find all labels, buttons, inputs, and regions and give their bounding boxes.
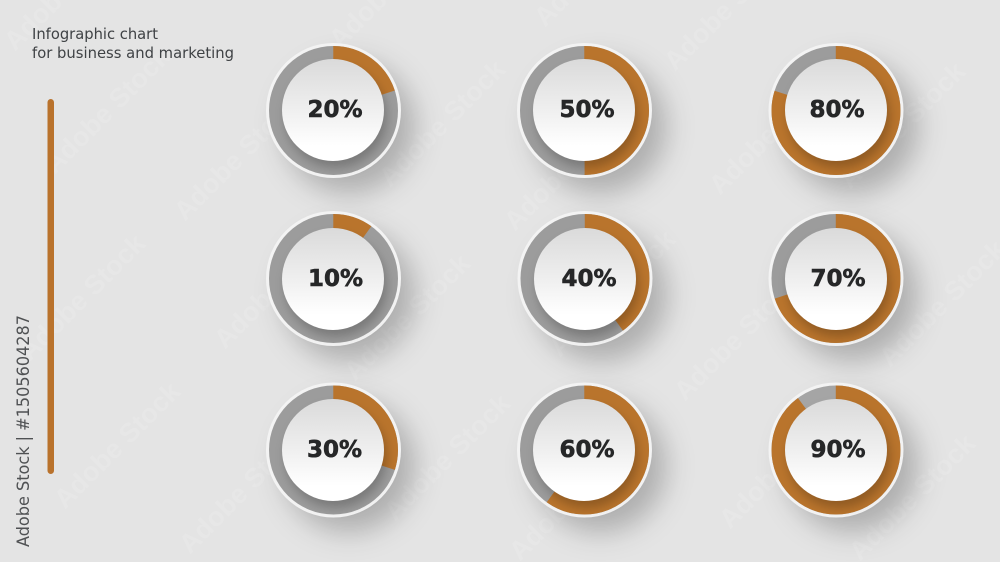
gauge: 90% [768,382,918,532]
gauge: 70%: 70% [810,266,866,292]
gauge: 80% [768,43,918,193]
text: Adobe Stock [338,248,477,386]
gauge: 80%: 80% [809,97,865,123]
text: Adobe Stock [38,41,177,179]
gauge: 50%: 50% [559,97,615,123]
gauge: 40%: 40% [561,266,617,292]
gauge: 90%: 90% [810,437,866,463]
text: Adobe Stock [378,388,517,526]
text: Adobe Stock [48,376,187,514]
text: Adobe Stock [498,98,637,236]
text: Adobe Stock [668,268,807,406]
text: Adobe Stock [833,56,972,194]
text: Adobe Stock [173,421,312,559]
gauge: 30% [266,382,415,532]
text: Adobe Stock [543,224,682,362]
gauge: 20%: 20% [307,97,363,123]
text: Adobe Stock [168,88,307,226]
title: for business and marketing [32,44,234,62]
title: Infographic chart [32,25,158,43]
stock id text: Adobe Stock | #1505604287 [14,315,34,547]
text: Adobe Stock [373,54,512,192]
title [32,25,234,62]
text: Adobe Stock [703,62,842,200]
gauge: 10%: 10% [308,266,363,292]
text: Adobe Stock [713,396,852,534]
gauge: 70% [768,211,918,361]
gauge: 40% [518,211,667,361]
text: Adobe Stock [13,228,152,366]
gauge: 50% [517,43,666,193]
gauge: 10% [266,211,415,361]
gauge: 60% [517,382,666,532]
gauge: 20% [266,43,415,193]
vertical progress bar [48,99,54,474]
gauge: 30%: 30% [307,437,362,463]
gauge: 60%: 60% [559,437,615,463]
text: Adobe Stock [208,216,347,354]
